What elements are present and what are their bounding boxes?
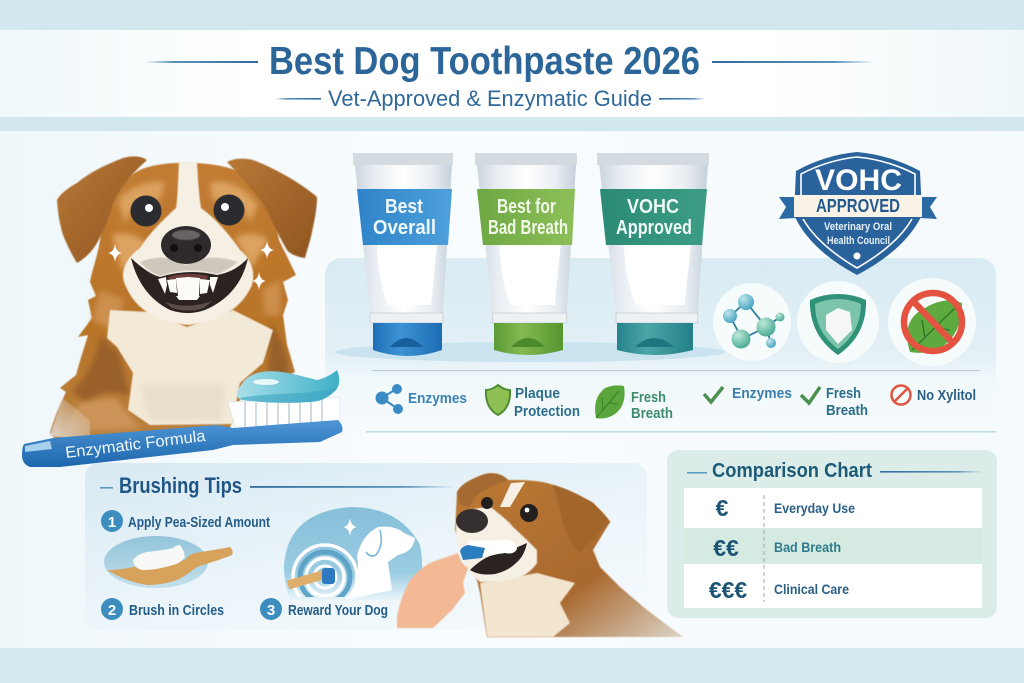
sparkles — [108, 241, 274, 290]
lower lip shine — [165, 301, 212, 310]
icon: check fresh breath — [801, 387, 820, 403]
circle icon: shield — [797, 281, 879, 363]
label: check fresh breath — [826, 385, 868, 419]
tube: best overall: Best — [385, 196, 423, 218]
benefit row — [376, 384, 976, 422]
corner fade — [50, 398, 90, 440]
row: clinical care: €€€ — [709, 577, 747, 603]
label: plaque protection: Plaque — [515, 385, 560, 402]
label: fresh breath — [631, 389, 673, 422]
hand — [397, 553, 468, 628]
circle icon: molecule — [713, 283, 791, 361]
dog body fur — [50, 163, 296, 445]
subtitle: Vet-Approved & Enzymatic Guide — [328, 86, 652, 111]
step 2: 2 — [108, 602, 116, 619]
step 1: 1 — [108, 514, 116, 531]
row: clinical care: Clinical Care — [774, 582, 849, 597]
label: fresh breath: Breath — [631, 405, 673, 422]
eyes — [481, 497, 538, 522]
step 2 — [101, 598, 224, 620]
icon: plaque shield — [486, 385, 510, 415]
product tubes — [353, 153, 709, 356]
chest — [107, 310, 273, 425]
heading: Brushing Tips — [119, 473, 242, 498]
tube: best for bad breath: Bad Breath — [488, 217, 568, 239]
row: everyday use — [716, 495, 855, 521]
header banner — [0, 30, 1024, 117]
VOHC approved badge: Health Council — [827, 235, 890, 247]
tube: best for bad breath — [475, 153, 577, 355]
label: enzymes: Enzymes — [408, 390, 467, 407]
bristles — [228, 397, 340, 428]
panel: benefit icons backdrop — [325, 258, 996, 433]
tube: VOHC approved: VOHC — [627, 196, 679, 218]
mouth — [470, 543, 527, 575]
label text: Enzymatic Formula — [64, 428, 207, 462]
smiling mouth — [131, 258, 248, 313]
VOHC approved badge: APPROVED — [816, 196, 900, 216]
icon: leaf — [595, 385, 625, 418]
panel: brushing tips — [85, 463, 647, 630]
label: plaque protection: Protection — [514, 403, 580, 420]
left ear — [457, 473, 508, 507]
tube: best overall: Overall — [373, 217, 436, 239]
label: plaque protection — [514, 385, 580, 420]
white blaze and muzzle — [123, 162, 253, 325]
row: bad breath: €€ — [713, 535, 739, 561]
label: no xylitol: No Xylitol — [917, 387, 976, 404]
nose — [161, 226, 211, 264]
side dog being brushed — [397, 473, 683, 637]
label: fresh breath: Fresh — [631, 389, 666, 406]
right ear — [227, 159, 317, 258]
label: check fresh breath: Breath — [826, 402, 868, 419]
chest shadow — [140, 385, 225, 420]
row: clinical care — [709, 577, 849, 603]
teeth — [158, 277, 218, 300]
step 1 — [101, 510, 270, 532]
nose — [456, 509, 488, 533]
grey lip shading — [140, 258, 238, 276]
row: bad breath — [713, 535, 841, 561]
fur shading — [66, 181, 290, 432]
ear — [553, 485, 610, 552]
icon: enzymes — [376, 384, 402, 414]
table — [684, 488, 982, 608]
toothbrush with label — [22, 370, 342, 467]
VOHC approved badge — [779, 152, 937, 275]
eyes — [130, 194, 244, 226]
panel: comparison chart — [667, 450, 997, 618]
icon: no xylitol — [892, 386, 910, 404]
row: bad breath: Bad Breath — [774, 540, 841, 555]
main dog illustration — [50, 156, 317, 445]
teeth — [468, 540, 517, 556]
cream band — [794, 195, 922, 217]
dog body — [455, 473, 683, 637]
step 3 — [260, 598, 388, 620]
toothpaste swirl — [237, 370, 339, 403]
icon: check enzymes — [704, 387, 723, 402]
step 3: Reward Your Dog — [288, 603, 388, 619]
chest — [480, 573, 575, 637]
shield — [794, 152, 922, 275]
illustration: brushing circles and white dog — [284, 507, 422, 609]
label: check fresh breath: Fresh — [826, 385, 861, 402]
tube: VOHC approved — [597, 153, 709, 355]
blaze — [500, 482, 525, 507]
row: everyday use: Everyday Use — [774, 501, 855, 516]
title: Best Dog Toothpaste 2026 — [269, 40, 700, 83]
handle — [22, 420, 342, 467]
step 1: Apply Pea-Sized Amount — [128, 515, 270, 531]
row: everyday use: € — [716, 495, 729, 521]
tube: best overall — [353, 153, 453, 356]
muzzle — [456, 508, 537, 582]
left ear — [57, 156, 147, 263]
VOHC approved badge: VOHC — [815, 164, 902, 197]
gums — [168, 274, 208, 282]
heading: Comparison Chart — [712, 459, 872, 482]
step 3: 3 — [267, 602, 275, 619]
illustration: paste on brush — [104, 536, 233, 588]
tube: best for bad breath: Best for — [497, 196, 556, 218]
VOHC approved badge: Veterinary Oral — [824, 221, 892, 233]
tube: VOHC approved: Approved — [616, 217, 692, 239]
step 2: Brush in Circles — [129, 603, 224, 619]
blue brush head — [460, 545, 485, 560]
label: check enzymes: Enzymes — [732, 385, 792, 402]
ribbon tails — [779, 197, 937, 219]
circle icon: no leaf — [888, 278, 976, 366]
